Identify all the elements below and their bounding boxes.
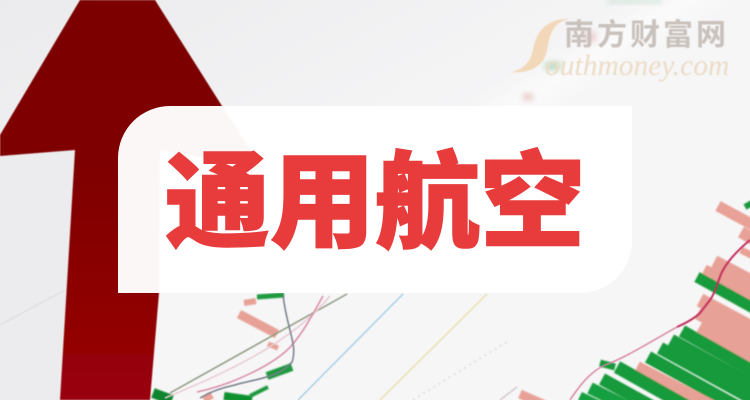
lower left paper corner [0,150,75,400]
watermark url: outhmoney.com [545,50,729,82]
chart: crimson trend line [570,240,750,400]
watermark logo: 南方财富网 southmoney.com [512,18,729,82]
icon: red arrow [0,0,262,400]
icon: swoosh S [512,18,569,73]
chart: candlesticks left cluster [153,295,292,400]
watermark Chinese name: 南方财富网 [564,19,729,52]
panel: title card [118,106,632,293]
chart: moving-average lines [165,294,517,400]
chart: candlesticks right cluster [520,203,750,400]
title: 通用航空 [165,145,585,262]
